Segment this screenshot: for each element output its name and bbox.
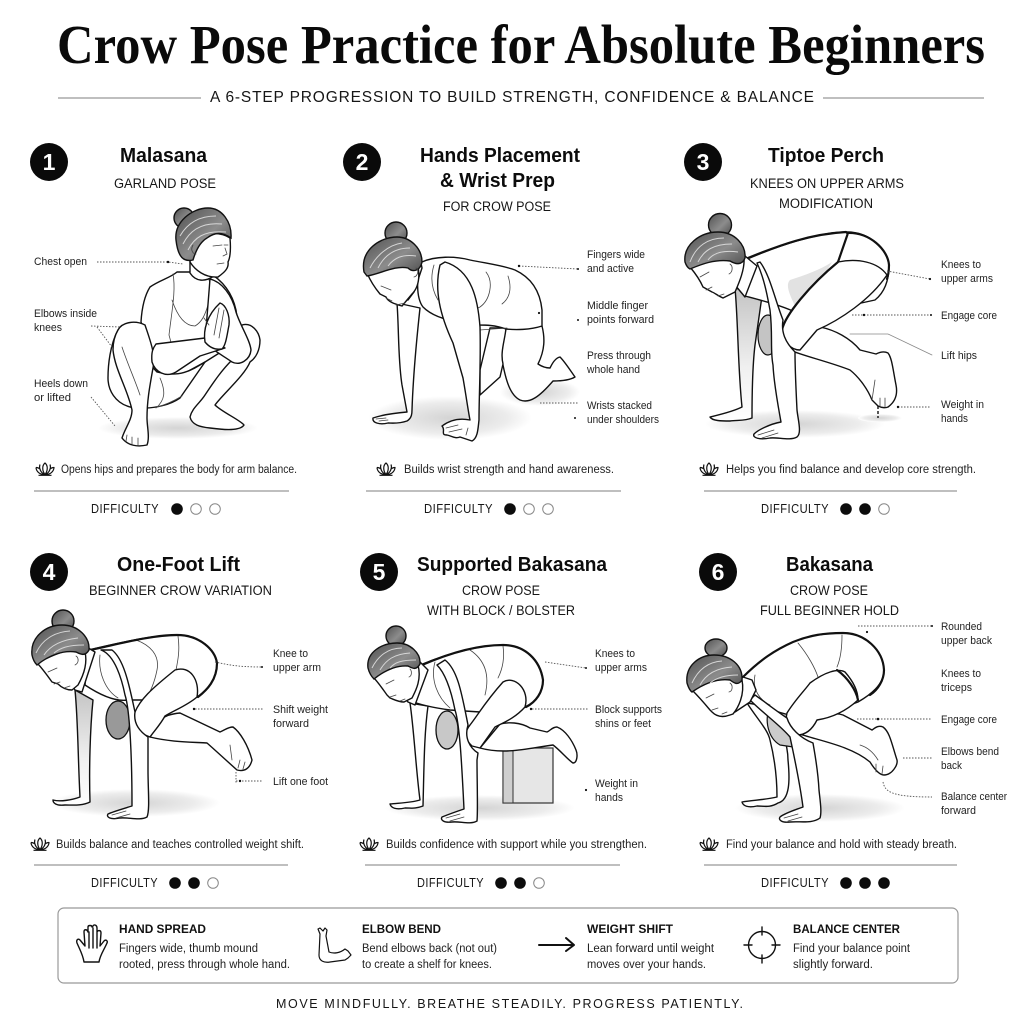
callout: wrists stacked under shoulders bbox=[540, 400, 659, 426]
subheading: FOR CROW POSE bbox=[443, 199, 551, 214]
figure: tiptoe perch bbox=[685, 214, 902, 439]
callout: fingers wide and active bbox=[518, 249, 645, 275]
yoga block bbox=[503, 748, 553, 803]
subheading: FULL BEGINNER HOLD bbox=[760, 603, 899, 618]
figure: garland pose bbox=[98, 208, 260, 446]
callout: knees to triceps: triceps bbox=[941, 682, 972, 694]
subheading: GARLAND POSE bbox=[114, 176, 216, 191]
callout: wrists stacked under shoulders: under shoulders bbox=[587, 414, 659, 426]
heading: & Wrist Prep bbox=[440, 170, 555, 192]
tip: elbow bend: Bend elbows back (not out) bbox=[362, 943, 497, 955]
callout: elbows inside knees: Elbows inside bbox=[34, 308, 97, 320]
callout: block supports shins or feet bbox=[530, 704, 662, 730]
benefit text: Helps you find balance and develop core strength. bbox=[726, 464, 976, 476]
callout: knee to upper arm bbox=[215, 648, 321, 674]
callout: fingers wide and active: and active bbox=[587, 263, 634, 275]
subheading: CROW POSE bbox=[462, 583, 540, 598]
subheading: CROW POSE bbox=[790, 583, 868, 598]
difficulty rating: DIFFICULTY bbox=[761, 502, 829, 516]
heading: Supported Bakasana bbox=[417, 554, 608, 576]
step number 1: 1 bbox=[43, 149, 56, 175]
callout: lift hips: Lift hips bbox=[941, 350, 977, 362]
icon: crosshair bbox=[744, 927, 780, 963]
figure: one-foot lift bbox=[32, 610, 252, 819]
step number 5 bbox=[360, 553, 398, 591]
difficulty rating: DIFFICULTY bbox=[761, 876, 829, 890]
difficulty rating bbox=[761, 876, 890, 890]
callout: knees to triceps: Knees to bbox=[941, 668, 981, 680]
callout: chest open: Chest open bbox=[34, 256, 87, 268]
tip: hand spread: Fingers wide, thumb mound bbox=[119, 943, 258, 955]
panel: step 4 One-Foot Lift bbox=[30, 553, 328, 890]
callout: middle finger points forward bbox=[538, 300, 654, 326]
difficulty rating: DIFFICULTY bbox=[417, 876, 484, 890]
tip: balance center bbox=[744, 922, 911, 971]
benefit text: Builds confidence with support while you strengthen. bbox=[386, 839, 647, 851]
heading: Bakasana bbox=[786, 554, 874, 576]
callout: knee to upper arm: Knee to bbox=[273, 648, 308, 660]
subheading bbox=[427, 583, 575, 618]
callout: knees to upper arms: upper arms bbox=[941, 273, 993, 285]
tip: elbow bend: ELBOW BEND bbox=[362, 922, 441, 936]
tip: balance center: BALANCE CENTER bbox=[793, 922, 900, 936]
icon: bent arm bbox=[318, 928, 351, 962]
difficulty rating: DIFFICULTY bbox=[91, 502, 159, 516]
callout: shift weight forward bbox=[193, 704, 328, 730]
callout: shift weight forward: Shift weight bbox=[273, 704, 328, 716]
heading bbox=[420, 145, 580, 192]
callout: block supports shins or feet: shins or feet bbox=[595, 718, 651, 730]
figure: tabletop hands placement bbox=[363, 222, 580, 441]
callout: heels down or lifted: or lifted bbox=[34, 392, 71, 404]
subheading: KNEES ON UPPER ARMS bbox=[750, 176, 904, 191]
callout: weight in hands bbox=[878, 399, 984, 425]
step number 3 bbox=[684, 143, 722, 181]
panel: step 5 Supported Bakasana bbox=[360, 553, 662, 890]
callout: fingers wide and active: Fingers wide bbox=[587, 249, 645, 261]
callout: knees to upper arms: upper arms bbox=[595, 662, 647, 674]
callout: lift one foot bbox=[236, 772, 328, 788]
difficulty rating bbox=[91, 502, 220, 516]
tip: hand spread: rooted, press through whole hand. bbox=[119, 959, 290, 971]
difficulty rating bbox=[417, 876, 544, 890]
panel: step 2 Hands Placement bbox=[343, 143, 659, 516]
callout: weight in hands bbox=[585, 778, 638, 804]
tip: hand spread: HAND SPREAD bbox=[119, 922, 206, 936]
callout: engage core bbox=[857, 714, 997, 726]
callout: weight in hands: hands bbox=[941, 413, 968, 425]
callout: rounded upper back bbox=[858, 621, 992, 647]
benefit text: Find your balance and hold with steady breath. bbox=[726, 839, 957, 851]
subheading: BEGINNER CROW VARIATION bbox=[89, 583, 272, 598]
callout: knees to upper arms bbox=[545, 648, 647, 674]
callout: elbows bend back: back bbox=[941, 760, 962, 772]
step number 2: 2 bbox=[356, 149, 368, 175]
difficulty rating bbox=[424, 502, 553, 516]
subheading: MODIFICATION bbox=[779, 196, 873, 211]
heading: Tiptoe Perch bbox=[768, 145, 884, 167]
difficulty rating: DIFFICULTY bbox=[91, 876, 158, 890]
callout: engage core: Engage core bbox=[941, 714, 997, 726]
panel: step 1 Malasana bbox=[30, 143, 297, 516]
callout: press through whole hand bbox=[586, 350, 651, 376]
heading: Hands Placement bbox=[420, 145, 580, 167]
benefit text: Builds balance and teaches controlled weight shift. bbox=[56, 839, 304, 851]
callout: lift hips bbox=[850, 334, 977, 362]
callout: rounded upper back: Rounded bbox=[941, 621, 982, 633]
panel: key technique tips bbox=[58, 908, 958, 983]
tip: weight shift: WEIGHT SHIFT bbox=[587, 922, 674, 936]
callout: balance center forward: forward bbox=[941, 805, 976, 817]
tip: hand spread bbox=[77, 922, 290, 971]
tip: elbow bend bbox=[318, 922, 497, 971]
step number 6 bbox=[699, 553, 737, 591]
callout: weight in hands: hands bbox=[595, 792, 623, 804]
callout: knees to upper arms bbox=[887, 259, 993, 285]
callout: balance center forward: Balance center bbox=[941, 791, 1007, 803]
callout: block supports shins or feet: Block supports bbox=[595, 704, 662, 716]
tip: balance center: Find your balance point bbox=[793, 943, 911, 955]
callout: press through whole hand: Press through bbox=[587, 350, 651, 362]
subtitle: A 6-STEP PROGRESSION TO BUILD STRENGTH, CONFIDENCE & BALANCE bbox=[210, 89, 814, 106]
panel: step 6 Bakasana bbox=[687, 553, 1007, 890]
callout: elbows inside knees: knees bbox=[34, 322, 62, 334]
callout: balance center forward bbox=[883, 782, 1007, 817]
callout: heels down or lifted: Heels down bbox=[34, 378, 88, 390]
heading: Malasana bbox=[120, 145, 208, 167]
callout: elbows bend back: Elbows bend bbox=[941, 746, 999, 758]
difficulty rating: DIFFICULTY bbox=[424, 502, 493, 516]
difficulty rating bbox=[91, 876, 218, 890]
callout: wrists stacked under shoulders: Wrists stacked bbox=[587, 400, 652, 412]
callout: knees to upper arms: Knees to bbox=[595, 648, 635, 660]
step number 2 bbox=[343, 143, 381, 181]
icon: hand bbox=[77, 925, 107, 962]
subheading bbox=[750, 176, 904, 211]
step number 3: 3 bbox=[697, 149, 709, 175]
callout: elbows bend back bbox=[903, 746, 999, 772]
callout: elbows inside knees bbox=[34, 308, 120, 347]
callout: weight in hands: Weight in bbox=[941, 399, 984, 411]
benefit text: Opens hips and prepares the body for arm balance. bbox=[61, 464, 297, 476]
callout: weight in hands: Weight in bbox=[595, 778, 638, 790]
figure: full bakasana bbox=[687, 633, 905, 822]
callout: middle finger points forward: Middle finger bbox=[587, 300, 648, 312]
subheading: WITH BLOCK / BOLSTER bbox=[427, 603, 575, 618]
callout: engage core: Engage core bbox=[941, 310, 997, 322]
callout: middle finger points forward: points forward bbox=[587, 314, 654, 326]
tip: weight shift bbox=[539, 922, 715, 971]
difficulty rating bbox=[761, 502, 889, 516]
footer tagline: MOVE MINDFULLY. BREATHE STEADILY. PROGRESS PATIENTLY. bbox=[276, 997, 743, 1011]
callout: shift weight forward: forward bbox=[273, 718, 309, 730]
heading: One-Foot Lift bbox=[117, 554, 240, 576]
callout: heels down or lifted bbox=[34, 378, 115, 426]
callout: press through whole hand: whole hand bbox=[586, 364, 640, 376]
benefit text: Builds wrist strength and hand awareness. bbox=[404, 464, 614, 476]
tip: balance center: slightly forward. bbox=[793, 959, 873, 971]
step number 6: 6 bbox=[712, 559, 724, 585]
tip: elbow bend: to create a shelf for knees. bbox=[362, 959, 492, 971]
callout: knee to upper arm: upper arm bbox=[273, 662, 321, 674]
icon: arrow bbox=[539, 938, 574, 951]
callout: knees to triceps bbox=[941, 668, 981, 694]
callout: lift one foot: Lift one foot bbox=[273, 776, 328, 788]
step number 4 bbox=[30, 553, 68, 591]
step number 5: 5 bbox=[373, 559, 386, 585]
figure: supported bakasana with block bbox=[368, 626, 577, 823]
tip: weight shift: Lean forward until weight bbox=[587, 943, 715, 955]
subheading bbox=[760, 583, 899, 618]
callout: knees to upper arms: Knees to bbox=[941, 259, 981, 271]
panel: step 3 Tiptoe Perch bbox=[684, 143, 997, 516]
step number 4: 4 bbox=[43, 559, 56, 585]
step number 1 bbox=[30, 143, 68, 181]
tip: weight shift: moves over your hands. bbox=[587, 959, 706, 971]
callout: rounded upper back: upper back bbox=[941, 635, 992, 647]
